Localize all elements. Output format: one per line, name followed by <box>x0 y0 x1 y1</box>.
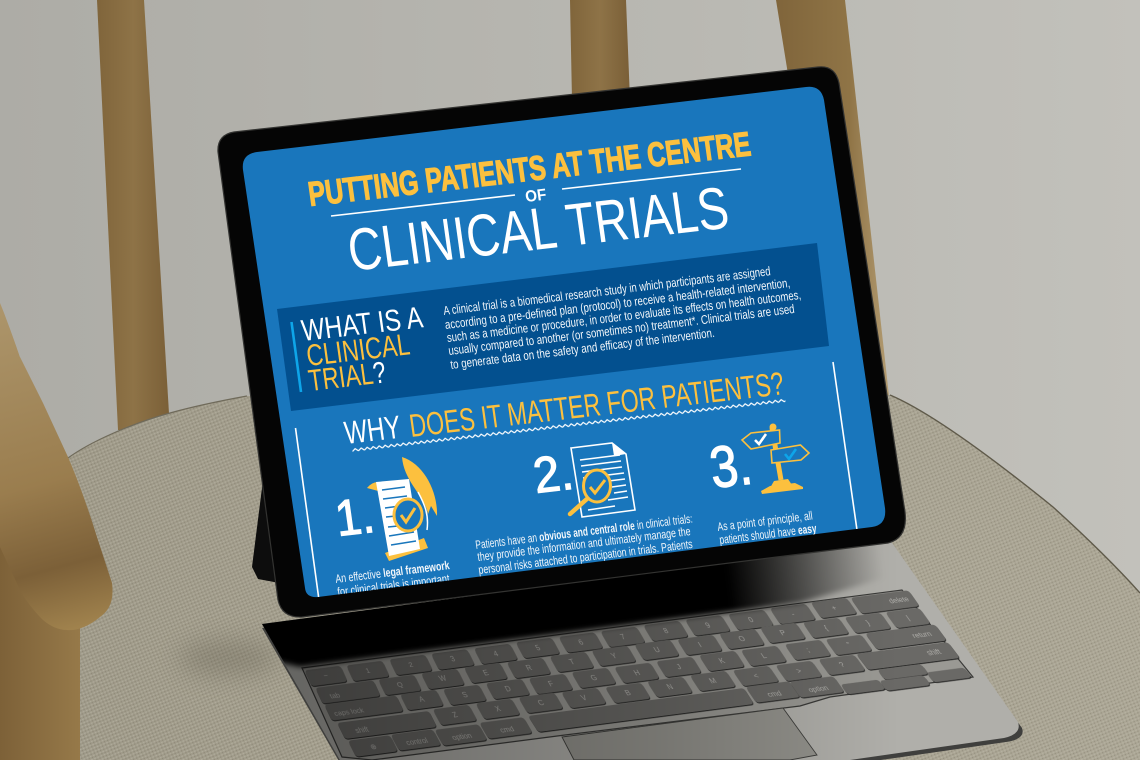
column three text <box>716 509 818 547</box>
heading does it matter for patients: DOES IT MATTER FOR PATIENTS? <box>407 365 786 444</box>
keyboard keys: ~ <box>322 671 330 680</box>
tablet body <box>218 67 905 617</box>
icon: signpost with checks <box>742 424 809 494</box>
keyboard keys: 6 <box>577 638 585 647</box>
chair back post left <box>97 0 170 430</box>
keyboard keys: 4 <box>492 649 500 658</box>
frame line right <box>833 362 857 530</box>
title rule left <box>331 195 515 216</box>
keyboard keys: + <box>829 603 839 612</box>
tablet stand behind <box>252 480 290 585</box>
heading trial: TRIAL? <box>306 356 388 398</box>
keyboard keys: > <box>794 666 804 675</box>
number two: 2. <box>530 443 577 504</box>
keyboard keys: U <box>652 645 662 654</box>
keyboard keys: " <box>845 641 853 649</box>
keyboard keys: 2 <box>407 660 415 669</box>
keyboard keys: 0 <box>746 615 755 624</box>
title word of: OF <box>524 186 548 206</box>
keyboard keys: W <box>437 674 448 683</box>
keyboard keys: F <box>546 679 556 688</box>
panel: what is a clinical trial <box>277 243 829 411</box>
definition paragraph: such as a medicine or procedure, in order to evaluate its effects on health outcomes, <box>446 288 802 345</box>
title line one: PUTTING PATIENTS AT THE CENTRE <box>306 125 753 214</box>
column one text: An effective legal framework <box>334 558 451 586</box>
keyboard keys: return <box>910 630 934 640</box>
chair arm <box>0 303 112 760</box>
keyboard keys: L <box>759 651 769 660</box>
definition paragraph: according to a pre-defined plan (protocol) to receive a health-related intervention, <box>444 276 791 332</box>
heading why: WHY <box>342 409 403 451</box>
trackpad <box>562 708 817 760</box>
keyboard keys: I <box>696 640 703 649</box>
keyboard keys: tab <box>328 691 342 700</box>
keyboard well <box>302 590 973 760</box>
keyboard keys: E <box>481 668 490 677</box>
column one text <box>336 560 450 594</box>
keyboard case base edge <box>262 546 1023 760</box>
keyboard keys: ? <box>837 660 847 669</box>
keyboard case base <box>262 540 1019 760</box>
keyboard keys: H <box>632 668 642 677</box>
keyboard keys: M <box>707 676 718 685</box>
keyboard keys <box>304 590 972 757</box>
keyboard keys: cmd <box>765 689 784 699</box>
keyboard keys: ; <box>804 646 812 654</box>
keyboard keys: < <box>751 671 761 680</box>
definition paragraph: A clinical trial is a biomedical research study in which participants are assigned <box>442 264 771 318</box>
keyboard keys: B <box>623 688 633 697</box>
heading what is a: WHAT IS A <box>299 301 426 348</box>
keyboard keys: T <box>567 657 577 666</box>
keyboard keys: R <box>524 663 534 672</box>
keyboard keys: } <box>864 619 872 627</box>
wavy underline <box>352 398 786 453</box>
accent bar <box>292 322 301 392</box>
keyboard keys: ⊕ <box>368 742 378 751</box>
keyboard keys: option <box>450 731 474 742</box>
keyboard keys: V <box>579 693 589 702</box>
keyboard keys: P <box>778 628 788 637</box>
keyboard keys: D <box>503 684 513 693</box>
definition paragraph <box>442 264 802 372</box>
keyboard keys: option <box>806 684 831 694</box>
keyboard keys: 7 <box>618 632 627 641</box>
icon: scroll with feather and check <box>367 457 437 561</box>
keyboard keys: cmd <box>498 725 516 735</box>
keyboard keys: 3 <box>449 655 457 664</box>
keyboard keys: 1 <box>364 666 372 675</box>
keyboard keys: shift <box>353 725 371 735</box>
keyboard keys: shift <box>924 648 944 657</box>
keyboard keys: X <box>493 704 502 713</box>
column two text: personal risks attached to participation in trials. Patients <box>477 537 693 577</box>
keyboard keys: 8 <box>661 626 670 635</box>
keyboard keys: 9 <box>703 621 712 630</box>
definition paragraph: to generate data on the safety and efficacy of the intervention. <box>449 326 715 372</box>
heading clinical: CLINICAL <box>304 328 412 373</box>
column one text: for clinical trials is important <box>336 571 451 599</box>
keyboard keys: S <box>460 690 469 699</box>
keyboard keys: 5 <box>534 643 542 652</box>
keyboard keys: C <box>536 698 546 707</box>
column three text: As a point of principle, all <box>716 509 813 534</box>
tablet screen <box>242 86 886 598</box>
keyboard keys: Q <box>395 680 405 689</box>
frame line left <box>296 428 319 600</box>
number three: 3. <box>706 432 756 501</box>
definition paragraph: usually compared to another (or sometimes no) treatment*. Clinical trials are used <box>447 302 795 358</box>
keyboard keys: control <box>404 736 430 747</box>
keyboard keys: G <box>589 673 599 682</box>
title clinical trials: CLINICAL TRIALS <box>344 174 733 284</box>
column two text: they provide the information and ultimately manage the <box>476 524 692 564</box>
number one: 1. <box>332 486 378 547</box>
keyboard left to right shading <box>262 540 1019 760</box>
shadow on seat <box>178 640 278 676</box>
keyboard keys: K <box>717 656 728 665</box>
tablet shadow on keyboard <box>262 546 876 670</box>
title rule right <box>562 169 741 189</box>
keyboard keys: A <box>417 695 426 704</box>
column three text: patients should have easy <box>718 521 818 547</box>
keyboard keys: N <box>665 682 675 691</box>
keyboard keys: Y <box>609 651 619 660</box>
chair back post right <box>776 0 889 396</box>
keyboard keys: { <box>822 624 830 632</box>
column two text: Patients have an obvious and central role in clinical trials: <box>474 512 693 552</box>
fabric seat <box>60 395 1140 760</box>
column two text <box>474 512 693 577</box>
keyboard keys: J <box>675 662 683 671</box>
keyboard keys: O <box>736 634 747 643</box>
keyboard keys: - <box>789 609 797 618</box>
keyboard keys: caps lock <box>332 706 366 718</box>
icon: document with magnifier <box>570 443 635 517</box>
keyboard keys: | <box>904 614 912 622</box>
chair back post centre <box>570 0 630 100</box>
keyboard keys: Z <box>450 710 460 719</box>
keyboard keys: delete <box>886 595 911 605</box>
